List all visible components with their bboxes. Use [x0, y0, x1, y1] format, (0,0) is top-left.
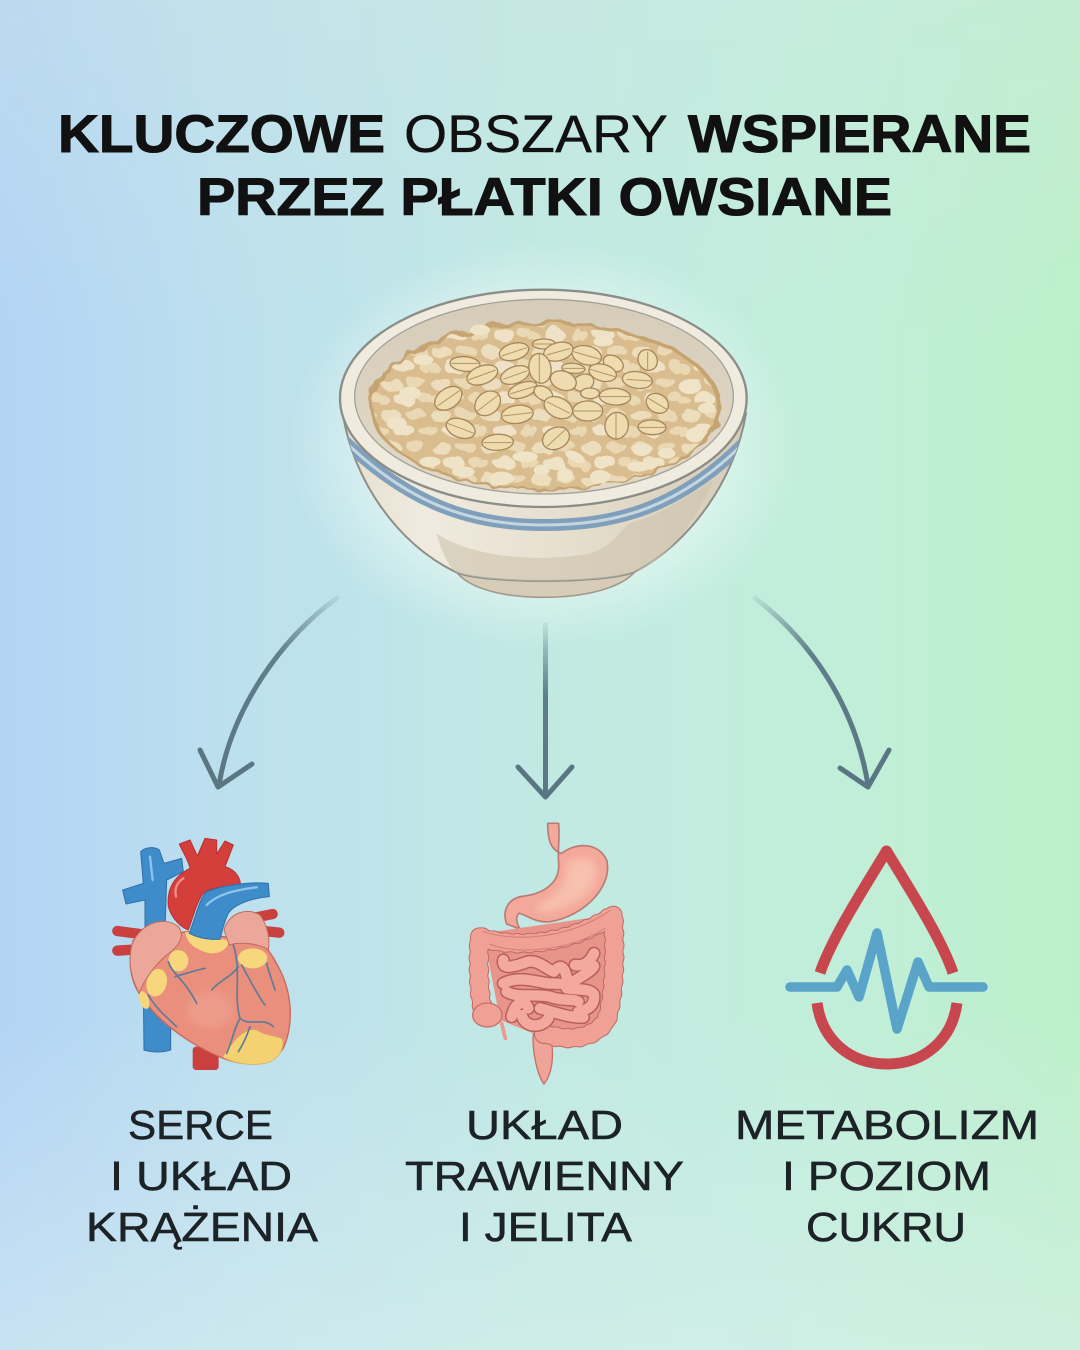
right atrium — [130, 921, 181, 993]
title: OBSZARY — [404, 105, 668, 164]
top fat — [136, 932, 267, 1010]
drop upper outline — [820, 851, 953, 973]
title: KLUCZOWE — [58, 105, 385, 164]
bowl foot — [453, 567, 638, 597]
appendix — [502, 1023, 505, 1038]
pulse line — [790, 933, 983, 1029]
upper vena cava — [123, 848, 183, 933]
porridge grains, front — [387, 325, 715, 485]
label: metabolism: CUKRU — [806, 1204, 966, 1250]
label: digestive system: I JELITA — [459, 1204, 633, 1250]
icon: digestive system — [473, 823, 614, 1084]
coronary vessels — [148, 945, 275, 1053]
colon — [479, 911, 614, 1038]
rim — [340, 290, 747, 507]
label: heart: SERCE — [128, 1102, 273, 1148]
bottom artery — [193, 1047, 219, 1070]
bottom fat — [223, 1030, 283, 1064]
oat porridge — [369, 321, 721, 491]
pulmonary artery — [189, 883, 269, 939]
ventricles — [130, 932, 290, 1063]
left atrium — [224, 911, 269, 949]
esophagus and stomach — [505, 823, 608, 929]
title: WSPIERANE — [688, 105, 1031, 164]
cecum — [473, 1003, 502, 1027]
bowl glow — [287, 240, 803, 650]
label: heart: KRĄŻENIA — [86, 1204, 319, 1250]
label: heart: I UKŁAD — [110, 1153, 292, 1199]
bowl inner wall — [355, 299, 733, 494]
icon: bowl of oatmeal — [340, 290, 750, 597]
arrow: left — [200, 598, 337, 787]
blue stripes — [340, 437, 750, 525]
intestine backing — [483, 915, 613, 1040]
vessel highlights — [150, 857, 257, 905]
icon: blood drop with pulse — [790, 851, 983, 1064]
title — [58, 105, 1031, 227]
lower vena cava — [143, 990, 171, 1052]
bowl body — [343, 413, 746, 581]
arrow: right — [755, 598, 889, 787]
icon: heart — [117, 838, 290, 1070]
label: digestive system: UKŁAD — [466, 1102, 623, 1148]
side vessels — [117, 914, 279, 951]
rectum — [533, 1033, 552, 1084]
label: metabolism: METABOLIZM — [735, 1102, 1039, 1148]
label: metabolism: I POZIOM — [782, 1153, 991, 1199]
small intestine loops — [503, 953, 594, 1025]
ventricle highlight — [187, 992, 233, 1028]
stomach highlight — [535, 858, 597, 912]
drop lower outline — [817, 1003, 957, 1064]
arrow: center — [518, 625, 572, 797]
aorta — [168, 838, 240, 930]
label: metabolism — [735, 1102, 1039, 1250]
label: heart — [86, 1102, 319, 1250]
flake creases — [437, 344, 667, 447]
label: digestive system — [405, 1102, 684, 1250]
title: PRZEZ PŁATKI OWSIANE — [197, 168, 892, 227]
oat flakes — [430, 339, 672, 454]
label: digestive system: TRAWIENNY — [405, 1153, 684, 1199]
